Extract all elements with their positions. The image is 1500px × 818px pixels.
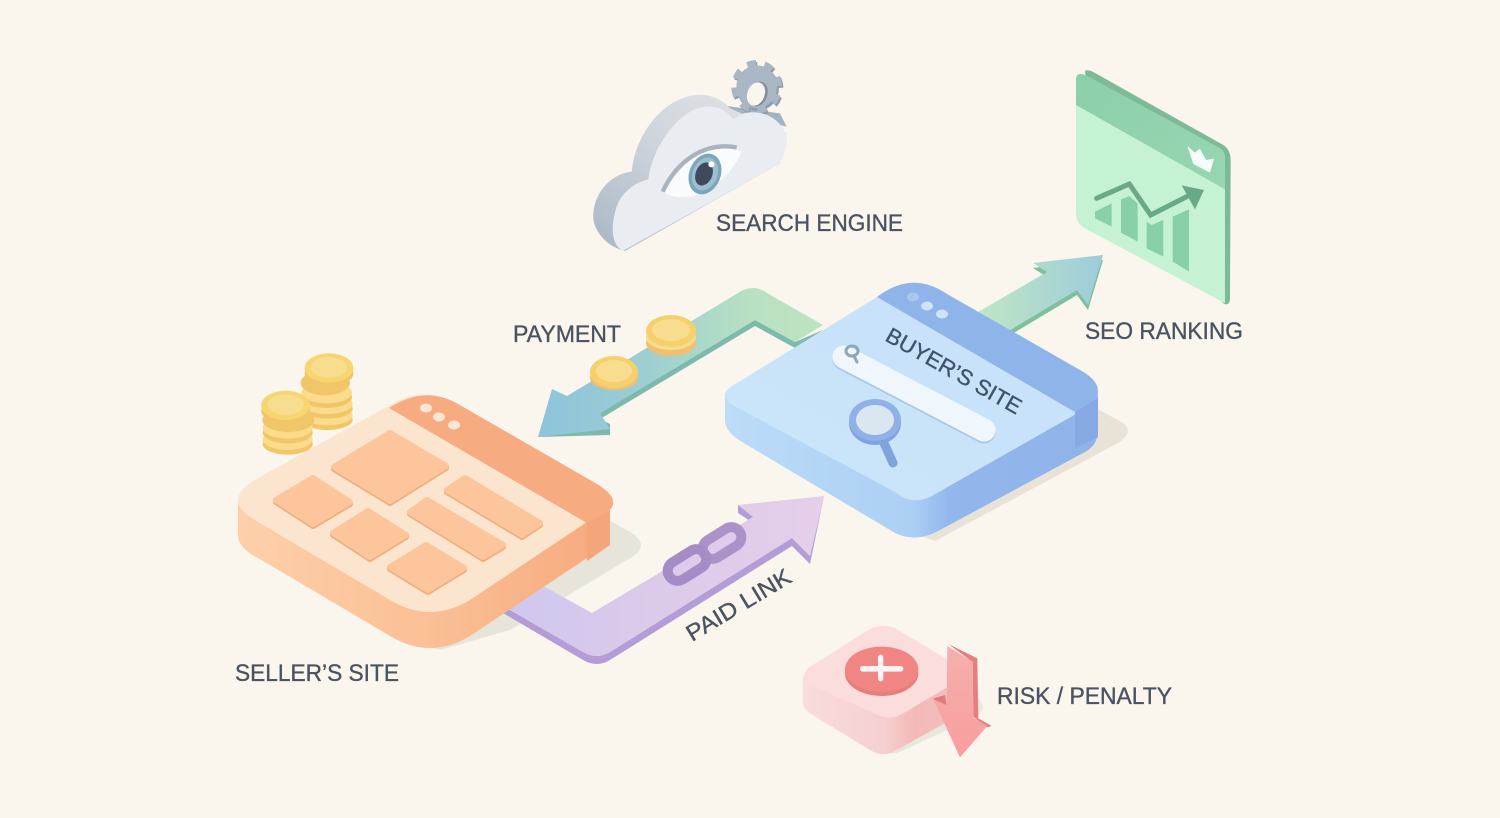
penalty badge xyxy=(845,647,918,696)
card face xyxy=(1076,74,1225,303)
icon: coin stacks xyxy=(261,353,353,455)
arrow: penalty down xyxy=(933,644,992,757)
panel: seller's site platform xyxy=(238,394,613,648)
icon: search engine cloud xyxy=(593,58,787,251)
back coin stack xyxy=(301,353,353,430)
label: risk / penalty: RISK / PENALTY xyxy=(997,683,1172,710)
window title bar xyxy=(389,395,613,523)
trend line arrow xyxy=(1097,184,1204,215)
icon: chain link xyxy=(664,523,745,585)
bar chart xyxy=(1095,196,1189,272)
card header band xyxy=(1076,74,1225,189)
icon: risk penalty xyxy=(803,626,992,757)
label: payment: PAYMENT xyxy=(513,321,621,348)
arrow: SEO ranking growth xyxy=(978,255,1103,337)
icon: eye xyxy=(662,146,742,199)
content tiles xyxy=(276,433,540,590)
risk block top xyxy=(804,626,963,717)
tiles shadow xyxy=(276,435,540,592)
icon: coin on arrow, upper xyxy=(646,315,696,356)
icon: magnifying glass xyxy=(849,399,901,463)
platform top xyxy=(725,283,1098,500)
platform shadows xyxy=(425,400,1128,650)
window dots xyxy=(420,404,460,430)
label: buyer's site: BUYER’S SITE xyxy=(882,323,1026,419)
label: search engine: SEARCH ENGINE xyxy=(716,210,903,237)
panel: buyer's site platform xyxy=(725,283,1098,538)
label: seller's site: SELLER’S SITE xyxy=(235,660,399,687)
risk shadow xyxy=(883,677,983,753)
platform top xyxy=(238,394,610,612)
icon: SEO ranking card xyxy=(1076,70,1231,304)
card back edge xyxy=(1085,70,1231,304)
label: paid link: PAID LINK xyxy=(681,563,796,646)
window title bar xyxy=(877,283,1098,412)
icon: crown xyxy=(1187,146,1214,173)
icon: small search glyph xyxy=(846,346,858,362)
risk block side xyxy=(803,677,963,754)
arrow: payment xyxy=(538,288,823,437)
icon: coin on arrow, lower xyxy=(590,356,638,390)
platform side xyxy=(238,500,610,648)
cloud front xyxy=(613,107,787,251)
label: SEO ranking: SEO RANKING xyxy=(1085,318,1243,345)
search bar xyxy=(844,357,984,432)
platform side xyxy=(725,390,1098,538)
cloud side xyxy=(593,95,787,251)
window dots xyxy=(907,292,948,318)
arrow: paid link xyxy=(500,496,824,664)
icon: gear xyxy=(720,58,787,127)
front coin stack xyxy=(261,391,314,455)
